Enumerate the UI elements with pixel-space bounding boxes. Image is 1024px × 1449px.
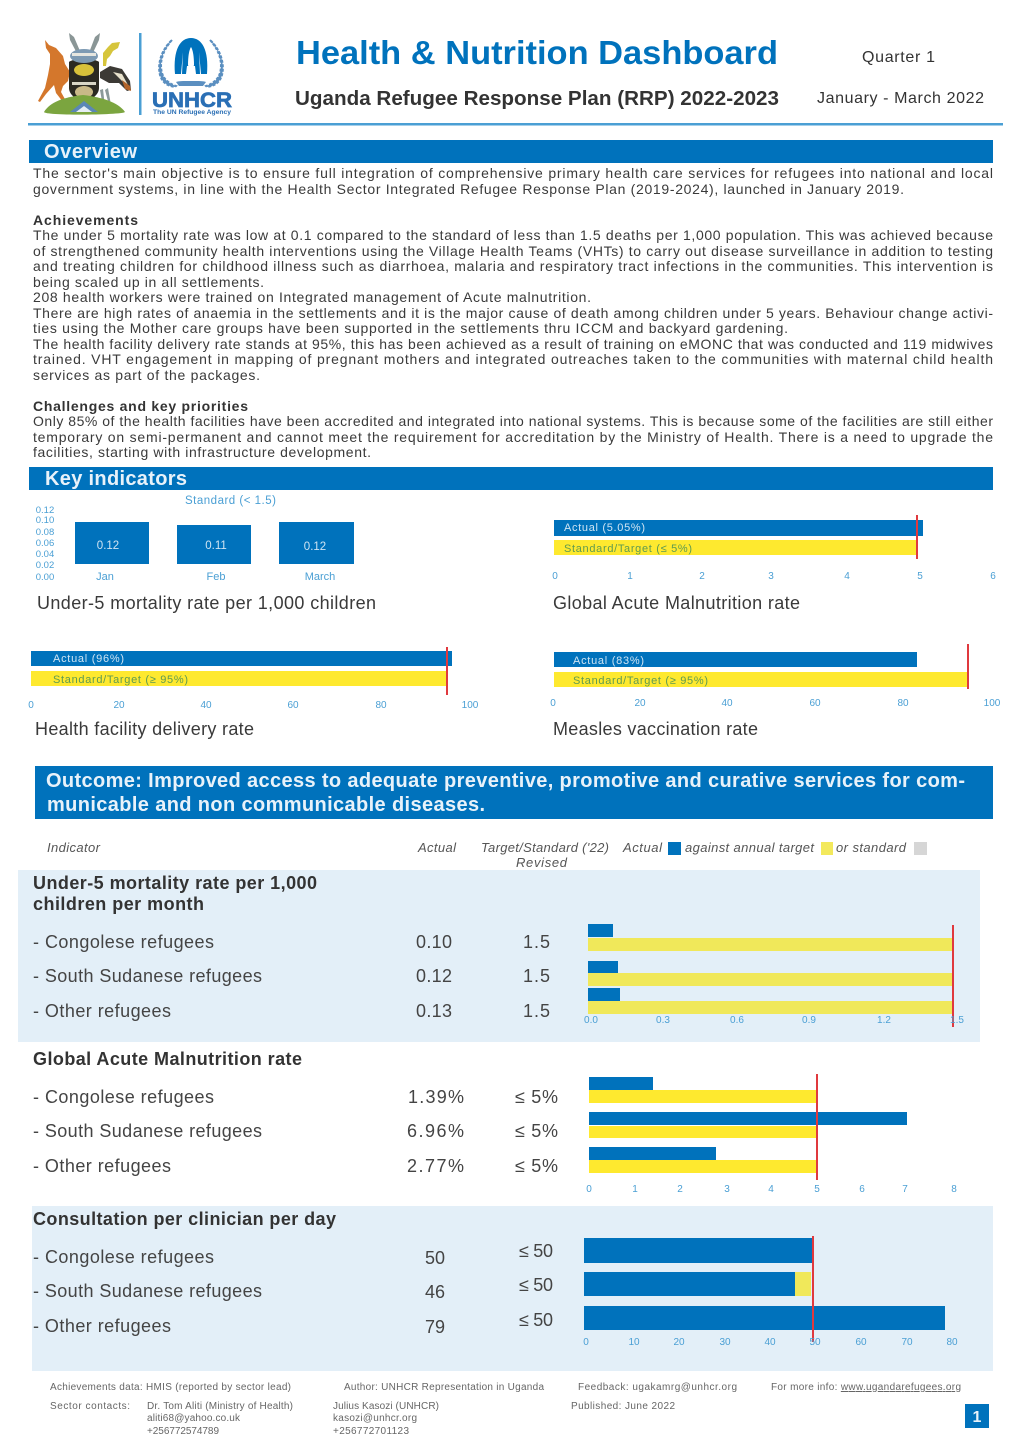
chart: under-5 mortality rate: 0.04 bbox=[36, 549, 54, 560]
chart: under-5 mortality by group: 1.5 bbox=[950, 1015, 964, 1026]
chart: consultation per clinician by group: 30 bbox=[719, 1337, 731, 1348]
chart: measles vaccination rate: 20 bbox=[634, 698, 646, 709]
chart: under-5 mortality rate: Feb bbox=[207, 571, 225, 583]
rows: under-5 mortality: 1.5 bbox=[523, 966, 550, 986]
chart title: health facility delivery: Health facility delivery rate bbox=[35, 719, 254, 739]
text block: achievements: being scaled up in all settlements. bbox=[33, 274, 264, 290]
chart: measles vaccination rate: 80 bbox=[897, 698, 909, 709]
chart: under-5 mortality rate: 0.11 bbox=[205, 540, 227, 552]
chart: under-5 mortality rate: 0.00 bbox=[36, 572, 54, 583]
table header and legend: against annual target bbox=[685, 840, 815, 855]
rows: consultation per clinician: 46 bbox=[425, 1282, 445, 1302]
chart: health facility delivery rate: 80 bbox=[375, 700, 387, 711]
rows: global acute malnutrition: ≤ 5% bbox=[515, 1156, 558, 1176]
logo: UNHCR bbox=[152, 38, 232, 116]
rows: under-5 mortality: 0.12 bbox=[416, 966, 452, 986]
chart: under-5 mortality rate: 0.12 bbox=[304, 541, 326, 553]
table header and legend: Actual bbox=[622, 840, 663, 855]
footer: Sector contacts: bbox=[50, 1401, 130, 1412]
text block: achievements: services as part of the packages. bbox=[33, 367, 260, 383]
footer: Feedback: ugakamrg@unhcr.org bbox=[578, 1382, 737, 1393]
chart: measles vaccination rate: Standard/Target (≥ 95%) bbox=[573, 675, 708, 687]
chart: measles vaccination rate: 60 bbox=[809, 698, 821, 709]
chart: global acute malnutrition rate: 6 bbox=[990, 571, 996, 582]
heading: outcome: Outcome: Improved access to adequate preventive, promotive and curative services for com- bbox=[46, 770, 965, 792]
rows: global acute malnutrition: 1.39% bbox=[408, 1087, 464, 1107]
chart title: global acute malnutrition: Global Acute Malnutrition rate bbox=[553, 593, 800, 613]
rows: consultation per clinician: ≤ 50 bbox=[519, 1310, 553, 1330]
chart: consultation per clinician by group bbox=[583, 1236, 958, 1348]
rows: under-5 mortality: - Other refugees bbox=[33, 1001, 171, 1021]
rows: global acute malnutrition: - South Sudanese refugees bbox=[33, 1121, 262, 1141]
chart: global acute malnutrition rate: 4 bbox=[844, 571, 850, 582]
chart: measles vaccination rate: Actual (83%) bbox=[573, 655, 644, 667]
chart: measles vaccination rate: 40 bbox=[721, 698, 733, 709]
chart: health facility delivery rate: 40 bbox=[200, 700, 212, 711]
chart: under-5 mortality rate: 0.12 bbox=[36, 505, 54, 516]
chart: global acute malnutrition rate: Standard/Target (≤ 5%) bbox=[564, 543, 692, 555]
chart: global acute malnutrition by group: 7 bbox=[902, 1184, 908, 1195]
chart: under-5 mortality rate: Jan bbox=[96, 571, 114, 583]
chart: under-5 mortality rate: Standard (< 1.5) bbox=[185, 495, 276, 507]
footer: Published: June 2022 bbox=[571, 1401, 675, 1412]
chart: consultation per clinician by group: 60 bbox=[855, 1337, 867, 1348]
chart: under-5 mortality rate bbox=[36, 495, 354, 583]
chart: consultation per clinician by group: 50 bbox=[809, 1337, 821, 1348]
rows: under-5 mortality bbox=[33, 932, 550, 1021]
rows: under-5 mortality: - Congolese refugees bbox=[33, 932, 214, 952]
chart: global acute malnutrition by group: 2 bbox=[677, 1184, 683, 1195]
text block: overview: The sector's main objective is to ensure full integration of comprehensive primary health care services for refugees into national and local bbox=[33, 165, 993, 181]
rows: consultation per clinician bbox=[33, 1241, 553, 1337]
heading: under-5 mortality: Under-5 mortality rate per 1,000 bbox=[33, 873, 317, 893]
heading: global acute malnutrition: Global Acute Malnutrition rate bbox=[33, 1049, 302, 1069]
page number bbox=[965, 1404, 989, 1428]
table header and legend bbox=[47, 840, 927, 870]
chart: global acute malnutrition by group: 6 bbox=[859, 1184, 865, 1195]
chart: under-5 mortality rate: 0.12 bbox=[97, 540, 119, 552]
text block: challenges and key priorities: Only 85% of the health facilities have been accredited and integrated into national systems. This is because some of the facilities are still either bbox=[33, 413, 993, 429]
text block: challenges and key priorities: facilities, starting with infrastructure development. bbox=[33, 444, 371, 460]
chart: global acute malnutrition rate: Actual (5.05%) bbox=[564, 522, 645, 534]
rows: under-5 mortality: 1.5 bbox=[523, 1001, 550, 1021]
panel: under-5 mortality rate bbox=[18, 870, 980, 1042]
chart: health facility delivery rate bbox=[28, 647, 479, 711]
heading: consultation per clinician: Consultation per clinician per day bbox=[33, 1209, 336, 1229]
heading: under-5 mortality bbox=[33, 873, 317, 914]
header rule bbox=[28, 123, 1003, 126]
rows: global acute malnutrition: 6.96% bbox=[407, 1121, 464, 1141]
chart: health facility delivery rate: 20 bbox=[113, 700, 125, 711]
chart: consultation per clinician by group: 80 bbox=[946, 1337, 958, 1348]
chart: under-5 mortality by group: 0.0 bbox=[584, 1015, 598, 1026]
heading: under-5 mortality: children per month bbox=[33, 894, 204, 914]
footer: +256772701123 bbox=[333, 1426, 409, 1437]
text block: achievements: of strengthened community health interventions using the Village Health Teams (VHTs) to carry out disease surveillance in addition to testing bbox=[33, 243, 993, 259]
table header and legend: or standard bbox=[836, 840, 907, 855]
text block: achievements: ties using the Mother care groups have been supported in the settlements thru ICCM and backyard gardening. bbox=[33, 320, 788, 336]
text block: achievements: Achievements bbox=[33, 212, 138, 228]
footer: Achievements data: HMIS (reported by sector lead) bbox=[50, 1382, 291, 1393]
chart: global acute malnutrition rate: 5 bbox=[917, 571, 923, 582]
chart: health facility delivery rate: Standard/Target (≥ 95%) bbox=[53, 674, 188, 686]
heading: Overview bbox=[29, 140, 993, 163]
text block: achievements: and treating children for childhood illness such as diarrhoea, malaria and respiratory tract infections in the communities. This intervention is bbox=[33, 258, 993, 274]
chart: global acute malnutrition by group: 3 bbox=[724, 1184, 730, 1195]
chart: consultation per clinician by group: 10 bbox=[628, 1337, 640, 1348]
rows: consultation per clinician: 50 bbox=[425, 1248, 445, 1268]
rows: under-5 mortality: 0.10 bbox=[416, 932, 452, 952]
chart: under-5 mortality rate: 0.06 bbox=[36, 538, 54, 549]
table header and legend: Actual bbox=[417, 840, 457, 855]
text block: achievements: There are high rates of anaemia in the settlements and it is the major cause of death among children under 5 years. Behaviour change activi- bbox=[33, 305, 993, 321]
rows: under-5 mortality: - South Sudanese refugees bbox=[33, 966, 262, 986]
heading: Key indicators bbox=[29, 467, 993, 490]
text block: achievements: trained. VHT engagement in mapping of pregnant mothers and integrated outreaches taken to the communities with maternal child health bbox=[33, 351, 993, 367]
chart: consultation per clinician by group: 0 bbox=[583, 1337, 589, 1348]
chart: global acute malnutrition by group: 5 bbox=[814, 1184, 820, 1195]
text block: challenges and key priorities: temporary on semi-permanent and cannot meet the requirement for accreditation by the Ministry of Health. There is a need to upgrade the bbox=[33, 429, 993, 445]
chart: under-5 mortality by group: 0.6 bbox=[730, 1015, 744, 1026]
rows: global acute malnutrition: 2.77% bbox=[407, 1156, 464, 1176]
rows: under-5 mortality: 0.13 bbox=[416, 1001, 452, 1021]
text block: overview bbox=[33, 165, 993, 197]
rows: global acute malnutrition: ≤ 5% bbox=[515, 1121, 558, 1141]
chart: measles vaccination rate: 100 bbox=[984, 698, 1001, 709]
rows: consultation per clinician: ≤ 50 bbox=[519, 1241, 553, 1261]
heading: Overview: Overview bbox=[44, 141, 137, 163]
chart: global acute malnutrition rate: 2 bbox=[699, 571, 705, 582]
footer bbox=[50, 1382, 961, 1437]
chart: global acute malnutrition rate: 1 bbox=[627, 571, 633, 582]
chart: global acute malnutrition rate: 3 bbox=[768, 571, 774, 582]
chart: global acute malnutrition by group: 8 bbox=[951, 1184, 957, 1195]
table header and legend: Target/Standard ('22) bbox=[481, 840, 609, 855]
chart: under-5 mortality rate: March bbox=[305, 571, 335, 583]
heading: outcome bbox=[35, 766, 993, 819]
text block: achievements: The health facility delivery rate stands at 95%, this has been achieved as a result of training on eMONC that was conducted and 119 midwives bbox=[33, 336, 993, 352]
footer: For more info: www.ugandarefugees.org bbox=[771, 1382, 961, 1393]
quarter label: Quarter 1 bbox=[862, 49, 935, 66]
rows: global acute malnutrition: - Congolese refugees bbox=[33, 1087, 214, 1107]
rows: consultation per clinician: - South Sudanese refugees bbox=[33, 1281, 262, 1301]
text block: achievements: The under 5 mortality rate was low at 0.1 compared to the standard of less than 1.5 deaths per 1,000 population. This was achieved because bbox=[33, 227, 993, 243]
panel: consultation per clinician bbox=[32, 1206, 993, 1371]
chart: under-5 mortality by group bbox=[584, 924, 964, 1027]
text block: overview: government systems, in line with the Health Sector Integrated Refugee Response Plan (2019-2024), launched in January 2019. bbox=[33, 181, 904, 197]
chart: under-5 mortality by group: 1.2 bbox=[877, 1015, 891, 1026]
footer: +256772574789 bbox=[147, 1426, 219, 1437]
chart: global acute malnutrition by group: 1 bbox=[632, 1184, 638, 1195]
rows: global acute malnutrition bbox=[33, 1087, 558, 1176]
text block: achievements bbox=[33, 212, 993, 383]
footer: Dr. Tom Aliti (Ministry of Health) bbox=[147, 1401, 293, 1412]
date range: January - March 2022 bbox=[817, 90, 984, 107]
logo: UNHCR: UNHCR bbox=[152, 89, 232, 112]
rows: global acute malnutrition: ≤ 5% bbox=[515, 1087, 558, 1107]
heading: Key indicators: Key indicators bbox=[45, 468, 187, 490]
chart: global acute malnutrition rate: 0 bbox=[552, 571, 558, 582]
chart: consultation per clinician by group: 20 bbox=[673, 1337, 685, 1348]
chart: global acute malnutrition by group: 4 bbox=[768, 1184, 774, 1195]
logo divider bbox=[139, 33, 142, 115]
chart: under-5 mortality rate: 0.08 bbox=[36, 527, 54, 538]
rows: consultation per clinician: ≤ 50 bbox=[519, 1275, 553, 1295]
chart: global acute malnutrition rate bbox=[552, 515, 996, 582]
footer: Author: UNHCR Representation in Uganda bbox=[344, 1382, 544, 1393]
chart: health facility delivery rate: 100 bbox=[462, 700, 479, 711]
title: Health & Nutrition Dashboard bbox=[296, 34, 778, 71]
chart: measles vaccination rate bbox=[550, 644, 1001, 709]
page number: 1 bbox=[973, 1409, 982, 1426]
heading: outcome: municable and non communicable diseases. bbox=[47, 794, 485, 816]
footer: Julius Kasozi (UNHCR) bbox=[333, 1401, 439, 1412]
chart: measles vaccination rate: 0 bbox=[550, 698, 556, 709]
rows: consultation per clinician: 79 bbox=[425, 1317, 445, 1337]
chart: under-5 mortality rate: 0.10 bbox=[36, 515, 54, 526]
chart: consultation per clinician by group: 70 bbox=[901, 1337, 913, 1348]
chart: health facility delivery rate: 0 bbox=[28, 700, 34, 711]
chart: under-5 mortality by group: 0.3 bbox=[656, 1015, 670, 1026]
rows: consultation per clinician: - Congolese refugees bbox=[33, 1247, 214, 1267]
chart title: under-5 mortality: Under-5 mortality rate per 1,000 children bbox=[37, 593, 376, 613]
chart: global acute malnutrition by group bbox=[586, 1074, 957, 1195]
text block: achievements: 208 health workers were trained on Integrated management of Acute malnutrition. bbox=[33, 289, 591, 305]
text block: challenges and key priorities: Challenges and key priorities bbox=[33, 398, 248, 414]
rows: under-5 mortality: 1.5 bbox=[523, 932, 550, 952]
subtitle: Uganda Refugee Response Plan (RRP) 2022-2023 bbox=[295, 88, 779, 110]
table header and legend: Indicator bbox=[47, 840, 101, 855]
logo: Uganda coat of arms bbox=[38, 33, 131, 115]
chart: under-5 mortality by group: 0.9 bbox=[802, 1015, 816, 1026]
rows: consultation per clinician: - Other refugees bbox=[33, 1316, 171, 1336]
panel: global acute malnutrition bbox=[33, 1049, 957, 1195]
footer: aliti68@yahoo.co.uk bbox=[147, 1413, 241, 1424]
chart: under-5 mortality rate: 0.02 bbox=[36, 560, 54, 571]
footer: kasozi@unhcr.org bbox=[333, 1413, 417, 1424]
rows: global acute malnutrition: - Other refugees bbox=[33, 1156, 171, 1176]
table header and legend: Revised bbox=[516, 855, 568, 870]
chart title: measles vaccination: Measles vaccination rate bbox=[553, 719, 758, 739]
logo: UNHCR: The UN Refugee Agency bbox=[153, 110, 232, 116]
chart: health facility delivery rate: 60 bbox=[287, 700, 299, 711]
chart: health facility delivery rate: Actual (96%) bbox=[53, 653, 124, 665]
text block: challenges and key priorities bbox=[33, 398, 993, 460]
chart: global acute malnutrition by group: 0 bbox=[586, 1184, 592, 1195]
chart: consultation per clinician by group: 40 bbox=[764, 1337, 776, 1348]
